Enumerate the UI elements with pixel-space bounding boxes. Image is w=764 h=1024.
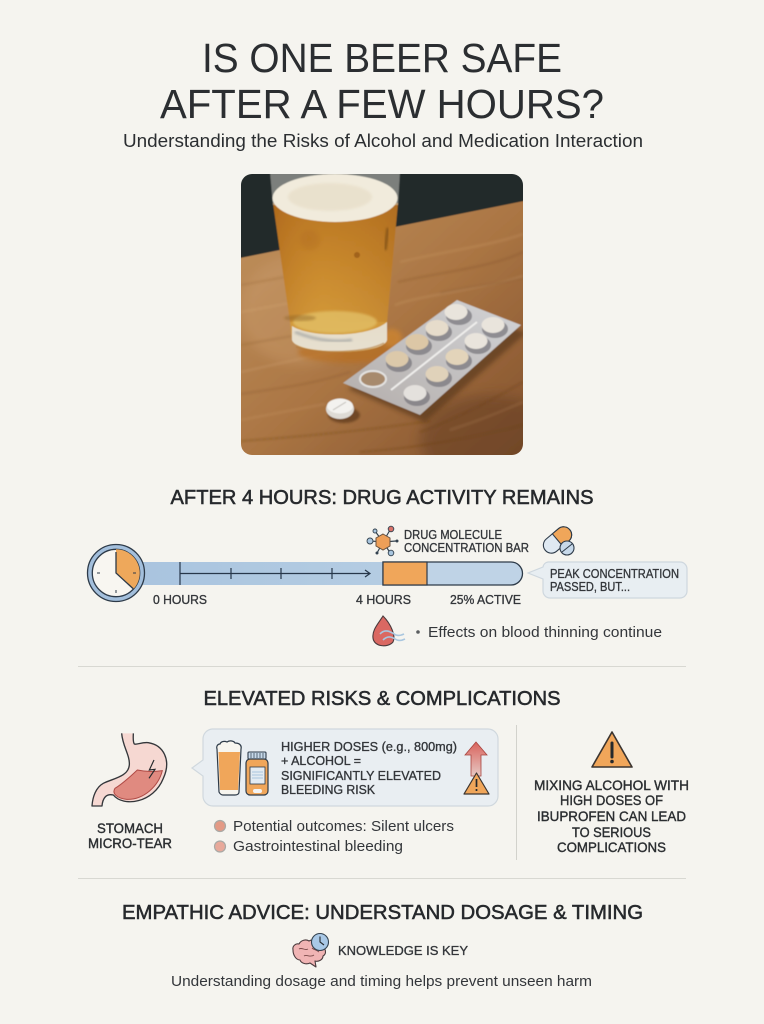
label: drug molecule concentration bar bbox=[404, 528, 529, 555]
title: AFTER A FEW HOURS? bbox=[160, 81, 604, 127]
drug concentration bar bbox=[383, 562, 522, 585]
callout: peak concentration bbox=[528, 562, 687, 598]
text: mixing alcohol warning: TO SERIOUS bbox=[572, 825, 651, 840]
callout: peak concentration: PEAK CONCENTRATION bbox=[550, 567, 679, 581]
icon: clock bbox=[88, 544, 144, 602]
list: potential outcomes: Gastrointestinal bleeding bbox=[233, 838, 403, 855]
title: IS ONE BEER SAFE bbox=[202, 35, 562, 81]
icon: blood drop bbox=[373, 616, 405, 646]
icon: small warning triangle bbox=[464, 773, 489, 794]
text: higher dose statement bbox=[281, 740, 457, 797]
label: drug molecule concentration bar: CONCENTRATION BAR bbox=[404, 541, 529, 555]
timeline band with hour ticks bbox=[140, 562, 383, 585]
icon: beer glass bbox=[217, 741, 241, 795]
icon: drug molecule bbox=[367, 526, 398, 556]
text: mixing alcohol warning: COMPLICATIONS bbox=[557, 840, 666, 855]
label: drug molecule concentration bar: DRUG MOLECULE bbox=[404, 528, 502, 542]
callout: peak concentration: PASSED, BUT... bbox=[550, 580, 630, 594]
text: mixing alcohol warning: IBUPROFEN CAN LEAD bbox=[537, 809, 686, 824]
icon: warning triangle bbox=[592, 732, 632, 767]
icon: brain with clock bbox=[293, 934, 328, 967]
heading: after 4 hours: AFTER 4 HOURS: DRUG ACTIVITY REMAINS bbox=[170, 486, 594, 509]
text: mixing alcohol warning: MIXING ALCOHOL WITH bbox=[534, 778, 689, 793]
text: higher dose statement: SIGNIFICANTLY ELEVATED bbox=[281, 769, 441, 783]
closing text: Understanding dosage and timing helps prevent unseen harm bbox=[171, 973, 592, 990]
icon: stomach with micro-tear bbox=[92, 733, 167, 806]
list: potential outcomes bbox=[214, 818, 454, 855]
text: mixing alcohol warning bbox=[534, 778, 689, 855]
heading: empathic advice: EMPATHIC ADVICE: UNDERSTAND DOSAGE & TIMING bbox=[122, 901, 643, 924]
timeline labels: 4 HOURS bbox=[356, 593, 411, 607]
text: higher dose statement: HIGHER DOSES (e.g., 800mg) bbox=[281, 740, 457, 754]
label: stomach micro-tear: MICRO-TEAR bbox=[88, 836, 172, 851]
timeline labels: 0 HOURS bbox=[153, 593, 207, 607]
subtitle: Understanding the Risks of Alcohol and Medication Interaction bbox=[123, 131, 643, 151]
glass shadow and amber glow bbox=[297, 344, 392, 364]
icon: rising risk arrow bbox=[465, 742, 487, 776]
panel: higher dose warning bbox=[192, 729, 498, 806]
heading: elevated risks: ELEVATED RISKS & COMPLICATIONS bbox=[204, 687, 560, 710]
text: blood thinning note: Effects on blood thinning continue bbox=[428, 624, 662, 641]
label: stomach micro-tear: STOMACH bbox=[97, 821, 163, 836]
label: stomach micro-tear bbox=[88, 821, 172, 851]
label: knowledge is key: KNOWLEDGE IS KEY bbox=[338, 944, 469, 958]
timeline labels: 25% ACTIVE bbox=[450, 593, 521, 607]
title bbox=[160, 35, 604, 127]
list: potential outcomes: Potential outcomes: Silent ulcers bbox=[233, 818, 454, 835]
timeline labels bbox=[153, 593, 521, 607]
photo: beer glass and blister pack on a wooden table bbox=[241, 174, 523, 455]
text: higher dose statement: BLEEDING RISK bbox=[281, 783, 376, 797]
icon: capsule and tablet bbox=[540, 524, 575, 556]
icon: medicine bottle bbox=[246, 752, 268, 795]
text: higher dose statement: + ALCOHOL = bbox=[281, 754, 361, 768]
text: mixing alcohol warning: HIGH DOSES OF bbox=[560, 793, 663, 808]
